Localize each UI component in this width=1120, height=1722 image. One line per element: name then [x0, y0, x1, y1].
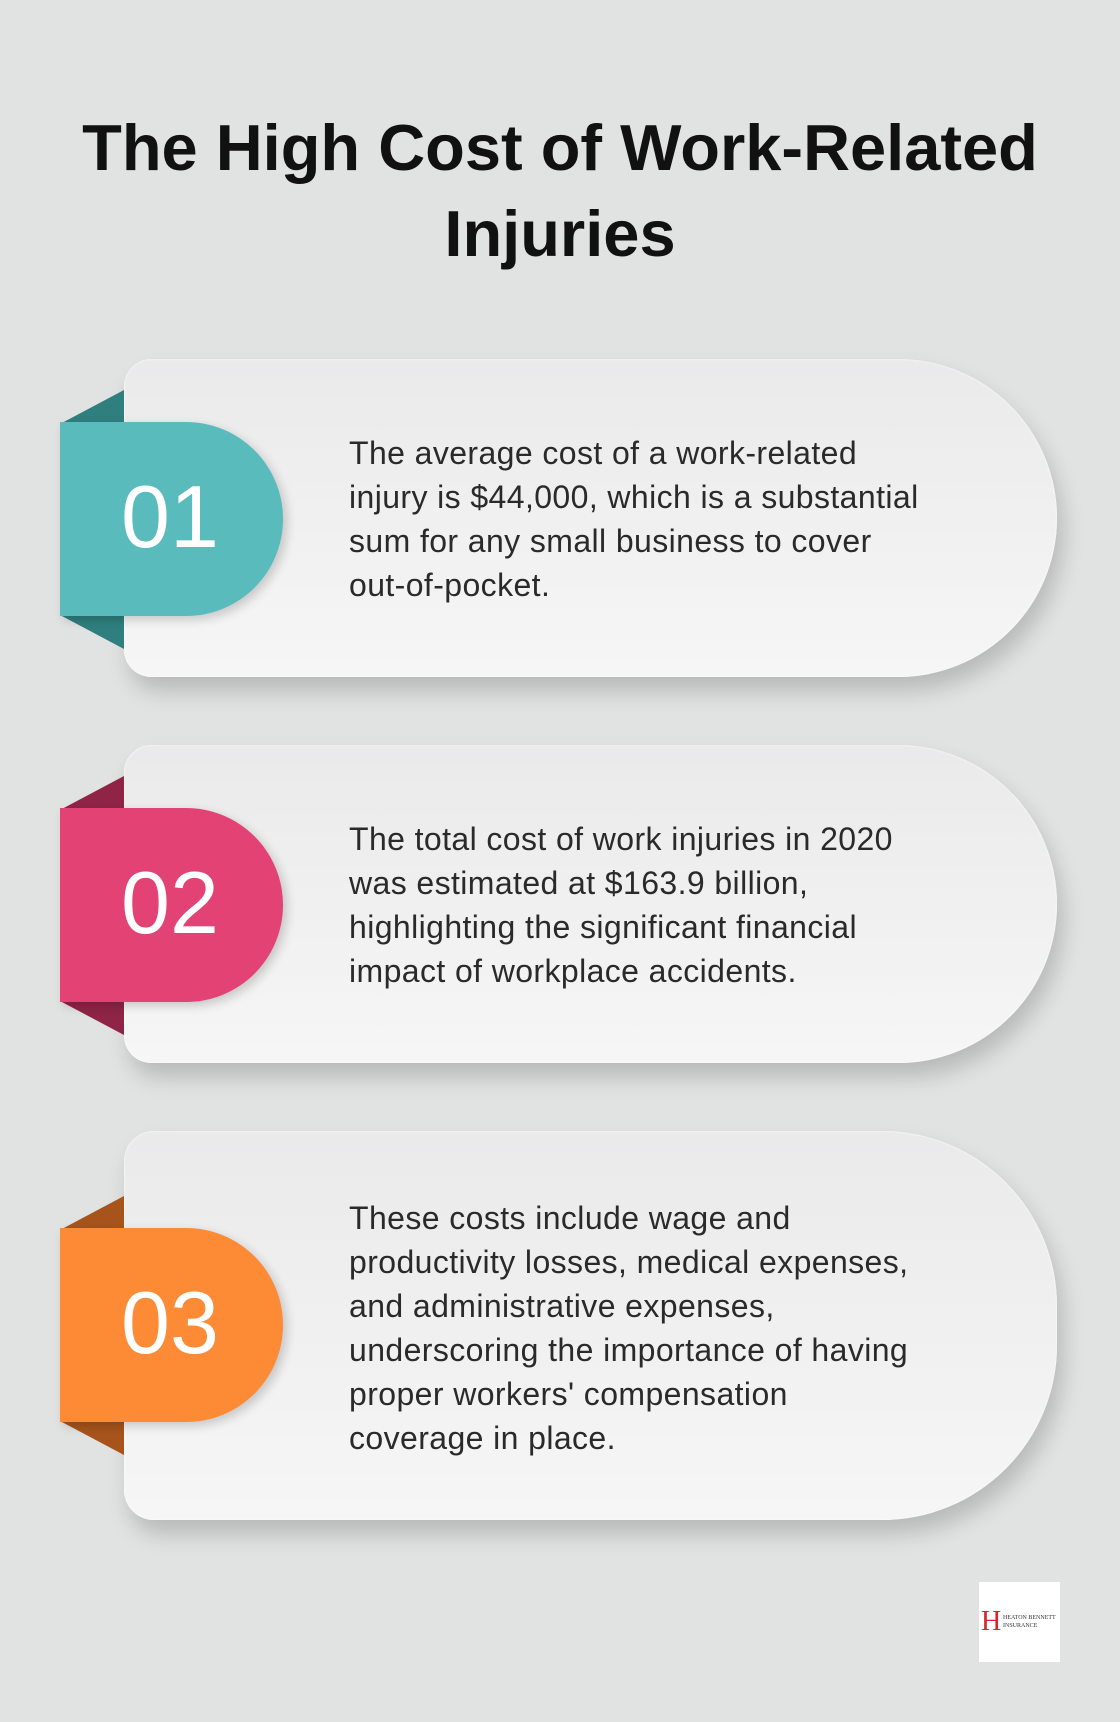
fold 3 top [64, 1196, 124, 1228]
tab 03: 03 [121, 1273, 219, 1372]
text 3: productivity losses, medical expenses, [349, 1244, 908, 1280]
text 3: coverage in place. [349, 1420, 616, 1456]
text 1: The average cost of a work-related [349, 435, 857, 471]
logo [979, 1582, 1060, 1662]
text 2: was estimated at $163.9 billion, [349, 865, 808, 901]
tab 02 [60, 808, 283, 1002]
tab 01: 01 [121, 467, 219, 566]
logo: H [981, 1606, 1001, 1637]
fold 1 top [64, 390, 124, 422]
fold 2 top [64, 776, 124, 808]
fold 3 bottom [62, 1422, 124, 1455]
text 1: injury is $44,000, which is a substantial [349, 479, 919, 515]
text 3: proper workers' compensation [349, 1376, 788, 1412]
text 3: underscoring the importance of having [349, 1332, 908, 1368]
text 1 [349, 435, 919, 603]
fold 2 bottom [62, 1002, 124, 1035]
text 2: The total cost of work injuries in 2020 [349, 821, 893, 857]
fold 1 bottom [62, 616, 124, 649]
panel: card 1 [124, 359, 1057, 677]
tab 02: 02 [121, 853, 219, 952]
title: Injuries [444, 197, 676, 270]
logo: INSURANCE [1003, 1623, 1037, 1629]
text 3: and administrative expenses, [349, 1288, 775, 1324]
text 1: sum for any small business to cover [349, 523, 872, 559]
panel: card 2 [124, 745, 1057, 1063]
title: The High Cost of Work-Related [82, 111, 1038, 184]
text 2: impact of workplace accidents. [349, 953, 797, 989]
text 3: These costs include wage and [349, 1200, 791, 1236]
tab 03 [60, 1228, 283, 1422]
tab 01 [60, 422, 283, 616]
title [82, 111, 1038, 270]
panel: card 3 [124, 1131, 1057, 1520]
logo: HEATON BENNETT [1003, 1615, 1056, 1621]
text 1: out-of-pocket. [349, 567, 550, 603]
text 2: highlighting the significant financial [349, 909, 857, 945]
text 2 [349, 821, 893, 989]
text 3 [349, 1200, 908, 1456]
